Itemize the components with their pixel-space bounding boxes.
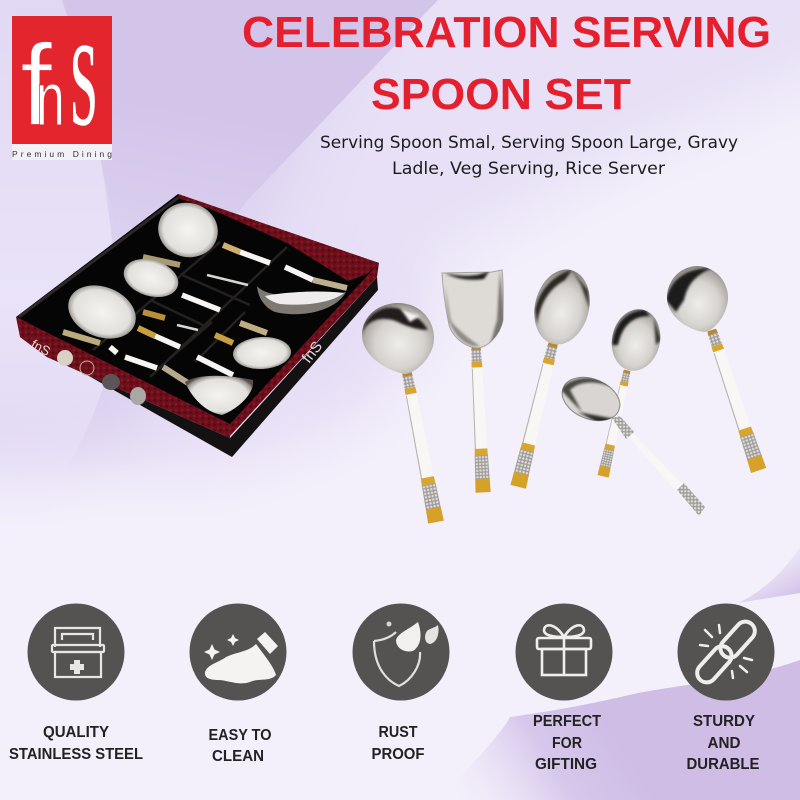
label	[208, 727, 272, 765]
logo: n	[36, 56, 65, 141]
title: SPOON SET	[371, 70, 631, 119]
feature: quality stainless steel	[9, 604, 143, 763]
subtitle: Serving Spoon Smal, Serving Spoon Large, Gravy	[320, 133, 738, 153]
icon: shield with droplets	[352, 604, 450, 700]
label	[686, 713, 760, 773]
logo: S	[70, 18, 98, 150]
label: CLEAN	[212, 748, 264, 765]
icon: gift box	[516, 604, 612, 700]
box logo marks: fnS	[299, 338, 326, 366]
label: QUALITY	[43, 724, 109, 741]
subtitle	[320, 133, 738, 179]
label	[9, 724, 143, 763]
label: RUST	[378, 724, 418, 741]
title	[242, 8, 771, 119]
feature: perfect for gifting	[516, 604, 612, 773]
logo	[12, 16, 112, 160]
feature: rust proof	[352, 604, 450, 763]
icon: chain link	[678, 604, 774, 700]
spoon 5 gravy ladle	[556, 369, 705, 516]
box logo marks	[29, 336, 326, 405]
label: GIFTING	[535, 756, 597, 773]
label: PROOF	[372, 746, 425, 763]
label: AND	[708, 735, 740, 752]
label: STURDY	[693, 713, 755, 730]
box body	[16, 194, 379, 457]
spoon 3 serving	[510, 270, 590, 489]
label	[372, 724, 425, 763]
icon: toolbox	[28, 604, 124, 700]
title: CELEBRATION SERVING	[242, 8, 771, 57]
gift box with spoons	[16, 194, 379, 457]
feature: sturdy and durable	[678, 604, 774, 773]
logo: f	[20, 20, 53, 150]
boxed spoons	[60, 196, 347, 415]
subtitle: Ladle, Veg Serving, Rice Server	[392, 159, 665, 179]
spoon 1 ladle	[362, 303, 444, 524]
label: DURABLE	[686, 756, 760, 773]
box logo marks: fnS	[29, 336, 53, 359]
spoon 6 ladle	[666, 266, 766, 473]
label: PERFECT	[533, 713, 601, 730]
logo: Premium Dining	[12, 149, 112, 159]
label: STAINLESS STEEL	[9, 746, 143, 763]
label: FOR	[552, 735, 582, 752]
label: EASY TO	[208, 727, 272, 744]
spoon 4 small serving	[598, 309, 660, 478]
feature: easy to clean	[190, 604, 286, 765]
label	[533, 713, 601, 773]
spoon 2 rice server	[442, 270, 506, 493]
box dividers	[93, 242, 287, 377]
icon: foam and sparkle	[190, 604, 286, 700]
